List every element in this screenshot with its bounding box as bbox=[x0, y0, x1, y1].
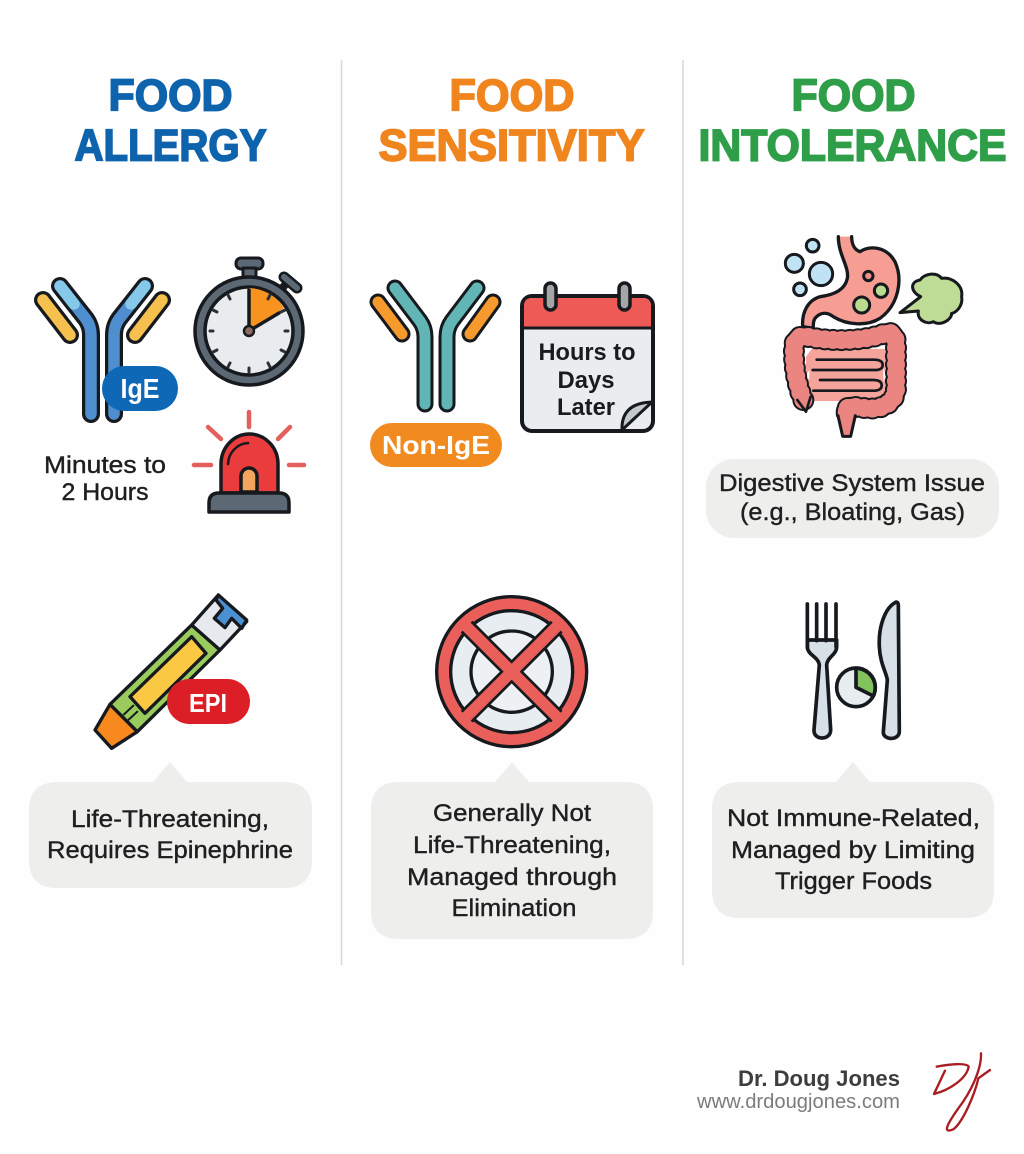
text: website: www.drdougjones.com bbox=[696, 1091, 900, 1113]
icon: calendar bbox=[522, 283, 653, 431]
callout: digestive system issue bbox=[706, 459, 999, 538]
callout: life-threatening bbox=[29, 762, 312, 888]
callout: generally not life-threatening: Elimination bbox=[452, 895, 576, 922]
heading: food intolerance: FOOD bbox=[792, 72, 916, 120]
heading: food allergy: FOOD bbox=[108, 72, 232, 120]
heading: food allergy bbox=[74, 72, 266, 170]
badge: IgE: IgE bbox=[120, 373, 160, 404]
text: hours to days later: Days bbox=[558, 367, 614, 394]
icon: epinephrine pen bbox=[95, 595, 247, 748]
callout: generally not life-threatening bbox=[371, 762, 653, 939]
callout: not immune-related: Not Immune-Related, bbox=[727, 805, 980, 832]
callout: generally not life-threatening: Life-Threatening, bbox=[413, 832, 611, 859]
callout: not immune-related: Managed by Limiting bbox=[731, 837, 975, 864]
badge: EPI bbox=[167, 679, 250, 724]
text: onset time bbox=[44, 452, 166, 506]
callout: not immune-related: Trigger Foods bbox=[775, 868, 932, 895]
panel: food allergy bbox=[29, 72, 312, 888]
callout: digestive system issue: Digestive System Issue bbox=[719, 470, 985, 497]
heading: food sensitivity: FOOD bbox=[450, 72, 574, 120]
callout: life-threatening: Life-Threatening, bbox=[71, 806, 269, 833]
icon: signature bbox=[934, 1053, 990, 1131]
badge: non-IgE bbox=[370, 423, 502, 467]
text: hours to days later: Hours to bbox=[538, 339, 636, 366]
badge: non-IgE: Non-IgE bbox=[382, 430, 490, 460]
small intestine bbox=[806, 349, 887, 401]
callout: not immune-related bbox=[712, 762, 994, 918]
heading: food sensitivity: SENSITIVITY bbox=[378, 122, 644, 170]
icon: digestive system bbox=[785, 237, 962, 436]
badge: EPI: EPI bbox=[189, 688, 227, 718]
text: onset time: 2 Hours bbox=[62, 479, 148, 506]
heading: food sensitivity bbox=[378, 72, 644, 170]
text: author name: Dr. Doug Jones bbox=[738, 1066, 900, 1091]
icon: non-IgE antibody bbox=[378, 288, 493, 404]
text: onset time: Minutes to bbox=[44, 452, 166, 479]
panel: food intolerance bbox=[698, 72, 1006, 918]
icon: crossed-out plate bbox=[437, 597, 587, 747]
callout: generally not life-threatening: Generally Not bbox=[433, 800, 591, 827]
text: hours to days later: Later bbox=[557, 394, 615, 421]
large intestine bbox=[794, 333, 896, 415]
footer: author credit bbox=[696, 1053, 990, 1131]
callout: life-threatening: Requires Epinephrine bbox=[47, 837, 293, 864]
heading: food intolerance: INTOLERANCE bbox=[698, 122, 1006, 170]
callout: digestive system issue: (e.g., Bloating, Gas) bbox=[740, 499, 965, 526]
icon: IgE antibody bbox=[43, 286, 178, 414]
callout: generally not life-threatening: Managed through bbox=[407, 864, 617, 891]
icon: fork, knife and portion bbox=[807, 602, 899, 738]
heading: food intolerance bbox=[698, 72, 1006, 170]
panel: food sensitivity bbox=[370, 72, 653, 939]
heading: food allergy: ALLERGY bbox=[74, 122, 266, 170]
text: hours to days later bbox=[538, 339, 636, 421]
icon: stopwatch bbox=[195, 258, 303, 385]
icon: alarm siren bbox=[194, 412, 304, 512]
